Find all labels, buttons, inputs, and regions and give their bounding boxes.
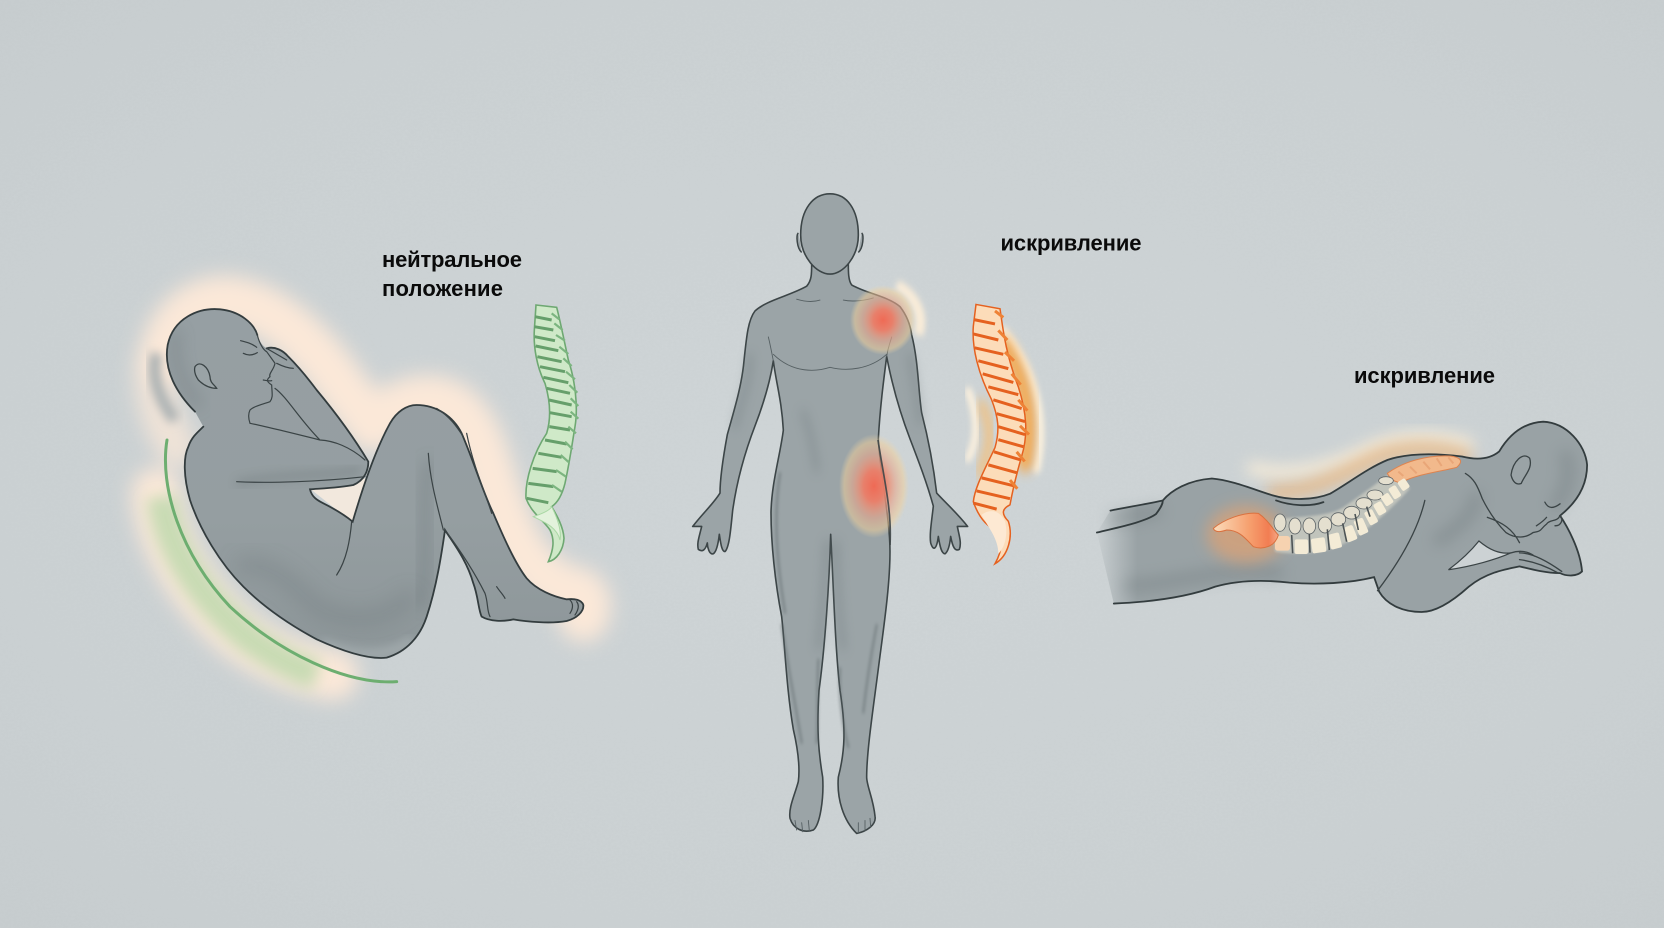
body outline	[1097, 422, 1587, 612]
body silhouette	[1097, 422, 1587, 612]
spine: green neutral	[526, 305, 578, 562]
vertebra gaps	[1292, 507, 1370, 553]
halo: green glow under back	[162, 497, 317, 675]
ear	[195, 364, 217, 388]
figure: standing front view with pain points	[693, 194, 1040, 833]
halo: cream glow around body	[155, 301, 586, 675]
vertebra processes	[1274, 477, 1393, 534]
pain point: shoulder	[850, 285, 916, 355]
label: neutral position: положение	[382, 276, 503, 301]
ear	[1511, 456, 1530, 484]
label: neutral position: нейтральное	[382, 247, 522, 272]
anatomy lines and soft shading	[735, 298, 920, 833]
body silhouette	[693, 263, 968, 833]
closed eye	[1536, 502, 1560, 526]
spine: orange curved	[973, 304, 1029, 564]
figure: lying prone with lumbar curve	[1097, 422, 1587, 612]
face, arm and ear lines	[1378, 473, 1562, 591]
label: curvature, standing figure: искривление	[1000, 230, 1142, 256]
sacrum	[1213, 513, 1278, 548]
gap between arm and torso	[1448, 541, 1511, 570]
vertebra bodies	[1275, 478, 1410, 554]
halo: cream arc over shoulder	[897, 285, 920, 335]
arc: green support line	[165, 440, 397, 682]
upper spine: orange ribs	[1387, 456, 1461, 483]
label: neutral position	[382, 247, 522, 301]
body silhouette	[167, 309, 583, 658]
spine: cream and orange in prone back	[1213, 456, 1461, 554]
soft shading	[1110, 451, 1568, 587]
face and inner contour lines	[237, 335, 578, 617]
closed eye and brow	[241, 341, 272, 381]
figure: sleeping on side, neutral position	[155, 301, 586, 682]
spine band behind vertebrae	[1273, 473, 1410, 554]
pain point: hip	[839, 434, 909, 545]
label: curvature, prone figure: искривление	[1354, 363, 1495, 388]
glow over back	[1252, 437, 1469, 492]
cream gap under forearm	[310, 478, 366, 523]
head	[797, 194, 863, 274]
halo: grey shadow behind head	[155, 353, 175, 420]
body outline	[167, 309, 583, 658]
spine glow	[968, 330, 1040, 474]
lumbar glow	[1207, 506, 1285, 563]
